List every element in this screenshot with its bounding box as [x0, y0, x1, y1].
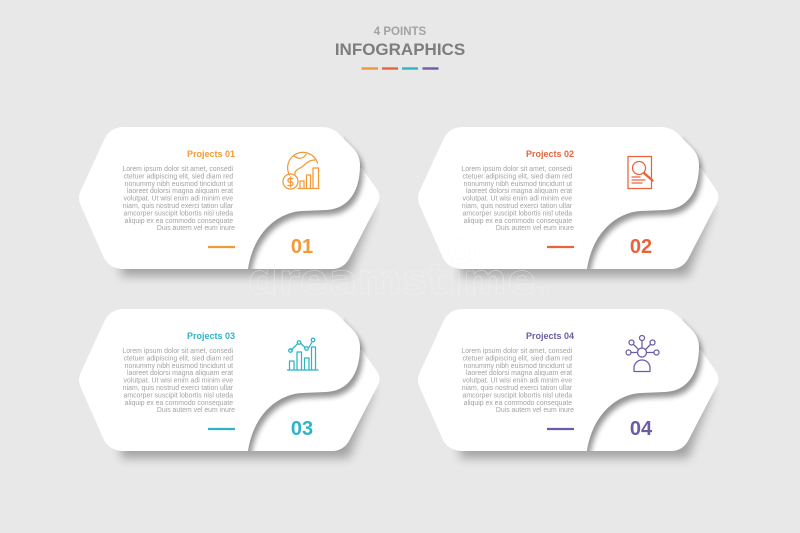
accent line [208, 246, 235, 248]
body text: niam, quis nostrud exerci tation ullar [123, 203, 234, 210]
heading: Projects 03 [187, 331, 235, 341]
body text: nonummy nibh euismod tincidunt ut [464, 363, 572, 370]
icon: bar and line chart [288, 338, 318, 370]
body text: ctetuer adipiscing elit, sied diam red [124, 173, 233, 180]
number: 01 [291, 236, 313, 258]
body text: laoreet dolorsi magna aliquam erat [466, 188, 572, 195]
body text: volutpat. Ut wisi enim adi minim eve [463, 196, 572, 203]
upper panel shape [79, 309, 360, 451]
title colour dashes [362, 67, 438, 70]
number: 02 [630, 236, 652, 258]
upper panel shape [79, 127, 360, 269]
body text: amcorper suscipit lobortis nisl uteda [124, 392, 233, 399]
curve shadow [248, 136, 366, 269]
body text: volutpat. Ut wisi enim adi minim eve [124, 196, 233, 203]
body text: nonummy nibh euismod tincidunt ut [464, 181, 572, 188]
body text: laoreet dolorsi magna aliquam erat [127, 370, 233, 377]
body text: Lorem ipsum dolor sit amet, consedi [122, 166, 234, 173]
curve shadow [248, 318, 366, 451]
upper panel shape [418, 127, 699, 269]
icon: globe with coin and bars [283, 152, 319, 189]
watermark: dreamstime [248, 255, 536, 304]
body text: laoreet dolorsi magna aliquam erat [466, 370, 572, 377]
panel: project 01 [79, 127, 380, 276]
accent line [547, 428, 574, 430]
body text: amcorper suscipit lobortis nisl uteda [124, 210, 233, 217]
body text: nonummy nibh euismod tincidunt ut [125, 363, 233, 370]
icon: person with network nodes [626, 336, 659, 372]
lower panel shape [240, 168, 380, 269]
heading: Projects 01 [187, 149, 235, 159]
upper panel shape [418, 309, 699, 451]
panel shadow [460, 386, 714, 458]
body text: Lorem ipsum dolor sit amet, consedi [461, 348, 573, 355]
panel: project 02 [418, 127, 718, 276]
body text: aliquip ex ea commodo consequate [464, 400, 572, 407]
body text: Duis autem vel eum inure [157, 225, 235, 232]
panel: project 03 [79, 309, 380, 458]
panel shadow [460, 204, 714, 276]
lower panel shape [579, 350, 718, 451]
lower panel shape [240, 350, 380, 451]
body text: laoreet dolorsi magna aliquam erat [127, 188, 233, 195]
title: INFOGRAPHICS [335, 40, 465, 59]
body text: ctetuer adipiscing elit, sied diam red [463, 355, 572, 362]
body text: aliquip ex ea commodo consequate [125, 218, 233, 225]
body text: ctetuer adipiscing elit, sied diam red [463, 173, 572, 180]
body text: nonummy nibh euismod tincidunt ut [125, 181, 233, 188]
body text: Duis autem vel eum inure [496, 407, 574, 414]
title: 4 POINTS [374, 26, 427, 38]
curve shadow [587, 318, 706, 451]
body text: niam, quis nostrud exerci tation ullar [462, 203, 573, 210]
body text: Lorem ipsum dolor sit amet, consedi [122, 348, 234, 355]
heading: Projects 02 [526, 149, 574, 159]
body text: niam, quis nostrud exerci tation ullar [123, 385, 234, 392]
icon: document with magnifier [628, 156, 652, 188]
body text: ctetuer adipiscing elit, sied diam red [124, 355, 233, 362]
lower panel shape [579, 168, 718, 269]
number: 03 [291, 418, 313, 440]
body text: Duis autem vel eum inure [157, 407, 235, 414]
body text: niam, quis nostrud exerci tation ullar [462, 385, 573, 392]
body text: volutpat. Ut wisi enim adi minim eve [124, 378, 233, 385]
panel: project 04 [418, 309, 718, 458]
title [335, 26, 465, 59]
panel shadow [121, 204, 375, 276]
body text: Duis autem vel eum inure [496, 225, 574, 232]
accent line [208, 428, 235, 430]
body text: amcorper suscipit lobortis nisl uteda [463, 210, 572, 217]
number: 04 [630, 418, 653, 440]
panel shadow [121, 386, 375, 458]
body text: Lorem ipsum dolor sit amet, consedi [461, 166, 573, 173]
body text: aliquip ex ea commodo consequate [464, 218, 572, 225]
accent line [547, 246, 574, 248]
body text: amcorper suscipit lobortis nisl uteda [463, 392, 572, 399]
curve shadow [587, 136, 706, 269]
heading: Projects 04 [526, 331, 574, 341]
body text: volutpat. Ut wisi enim adi minim eve [463, 378, 572, 385]
body text: aliquip ex ea commodo consequate [125, 400, 233, 407]
